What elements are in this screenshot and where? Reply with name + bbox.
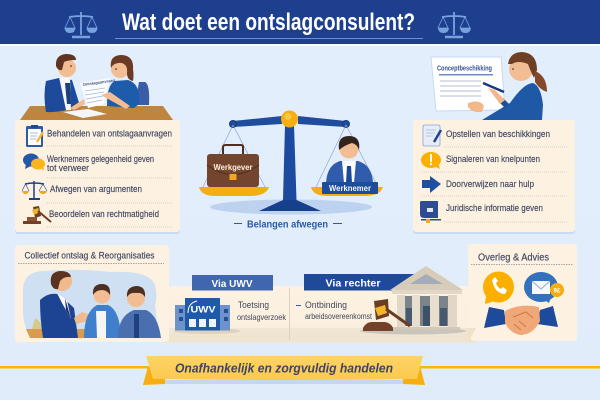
icon: warning bubble	[421, 152, 441, 169]
panel: left task list: tot verweer	[47, 163, 89, 174]
text: requests: Behandelen van ontslagaanvragen	[47, 128, 172, 140]
ribbon: via rechter	[304, 274, 418, 290]
icon: phone bubble	[483, 272, 514, 304]
illustration: consultant and client at desk: Ontslagaanvraag	[82, 77, 116, 87]
text: dissolution	[296, 300, 373, 321]
header bar	[0, 0, 600, 46]
illustration: balance scale	[199, 110, 383, 230]
icon: writing document	[423, 125, 441, 146]
icon: handshake	[484, 306, 558, 335]
icon: mail bubble: 9£	[554, 288, 561, 294]
ribbon: via rechter: Via rechter	[326, 278, 381, 290]
icon: courthouse	[360, 266, 466, 334]
icon: judge gavel	[363, 299, 410, 331]
text: review	[237, 300, 287, 322]
illustration: consultant and client at desk	[20, 54, 173, 120]
panel: collective dismissal	[15, 245, 169, 342]
text: review: ontslagverzoek	[237, 312, 287, 322]
text: referral: Doorverwijzen naar hulp	[446, 179, 534, 190]
text: weigh: Afwegen van argumenten	[50, 184, 142, 195]
icon: employee	[322, 136, 378, 194]
icon: UWV building	[174, 298, 240, 334]
central band: procedures	[165, 266, 477, 342]
banner: independent and careful: Onafhankelijk en zorgvuldig handelen	[175, 362, 393, 376]
text: review: Toetsing	[238, 300, 269, 310]
icon: briefcase: Werkgever	[214, 163, 252, 172]
text: signal: Signaleren van knelpunten	[446, 154, 540, 165]
icon: arrow	[422, 176, 441, 193]
icon: UWV building: UWV	[190, 304, 216, 314]
panel: consultation and advice	[466, 244, 577, 342]
title: Wat doet een ontslagconsulent?	[122, 9, 415, 36]
text: lawfulness: Beoordelen van rechtmatigheid	[49, 209, 159, 220]
ribbon: via UWV: Via UWV	[212, 279, 253, 290]
heading: collective dismissal: Collectief ontslag & Reorganisaties	[24, 250, 155, 262]
icon: right scales	[438, 12, 471, 37]
icon: gavel	[23, 206, 51, 224]
banner: independent and careful	[0, 356, 600, 385]
panel: right task list	[413, 120, 575, 234]
text: drafting: Opstellen van beschikkingen	[446, 129, 550, 140]
panel: left task list	[15, 120, 180, 234]
text: dissolution: arbeidsovereenkomst	[305, 312, 373, 321]
caption: weighing interests: Belangen afwegen	[247, 220, 328, 230]
icon: left scales	[64, 12, 98, 37]
text: hearing: Werknemers gelegenheid geven	[47, 154, 154, 165]
icon: law book	[420, 201, 441, 223]
icon: small scales	[22, 181, 47, 199]
ribbon: via UWV	[192, 275, 273, 290]
text: dissolution: Ontbinding	[305, 300, 347, 310]
heading: consultation: Overleg & Advies	[478, 252, 549, 264]
illustration: woman writing concept decision	[431, 52, 547, 120]
text: legal info: Juridische informatie geven	[446, 203, 543, 214]
icon: clipboard	[26, 125, 43, 147]
icon: briefcase	[207, 145, 259, 187]
illustration: woman writing concept decision: Conceptbeschikking	[437, 64, 492, 72]
illustration: three people talking	[23, 270, 161, 338]
icon: employee: Werknemer	[329, 184, 371, 193]
icon: speech bubbles	[23, 154, 45, 171]
